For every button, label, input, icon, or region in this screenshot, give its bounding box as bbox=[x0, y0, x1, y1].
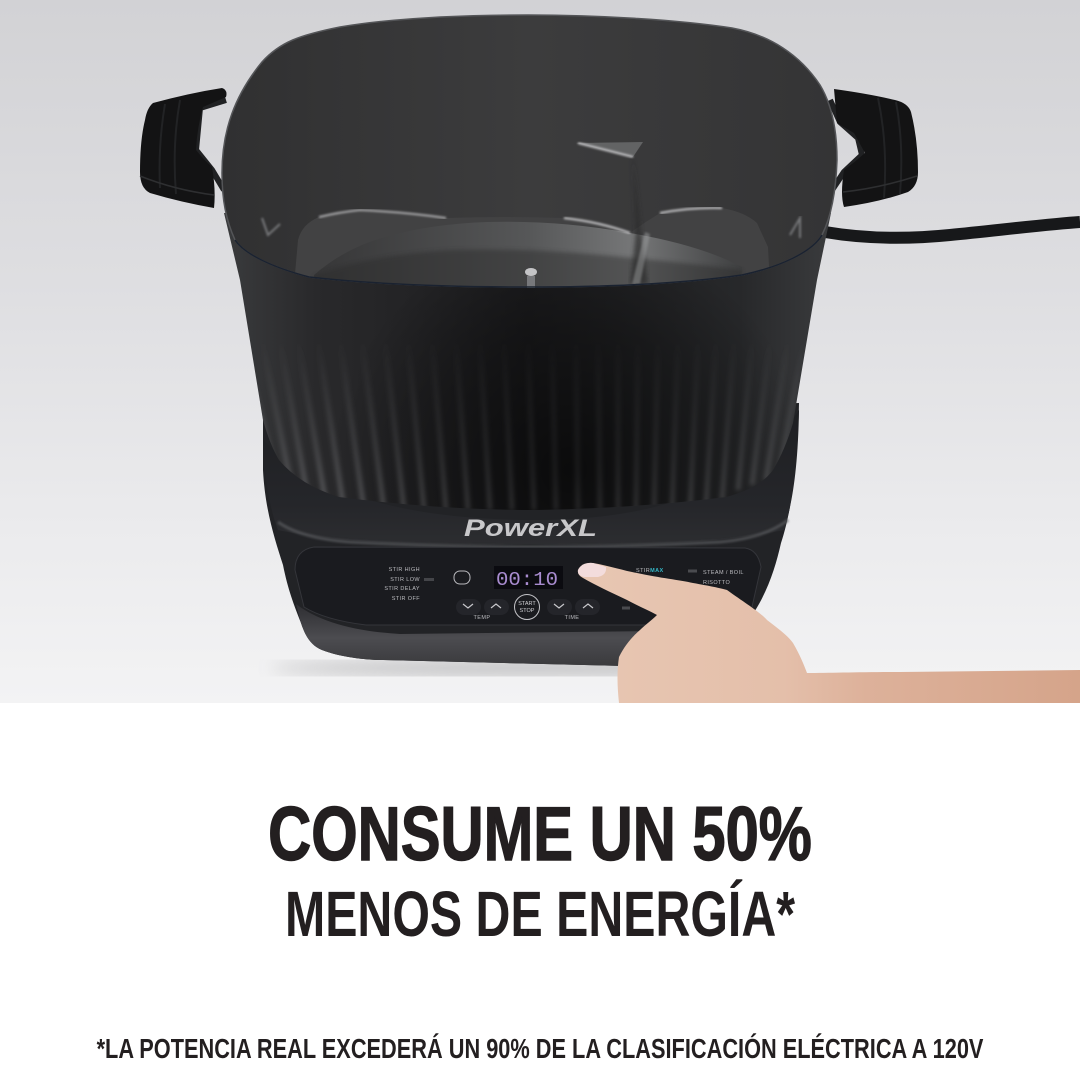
fingernail bbox=[578, 563, 606, 577]
product photo bbox=[0, 0, 1080, 703]
power cord bbox=[825, 222, 1080, 238]
logo: PowerXL bbox=[464, 515, 597, 542]
inner bowl bbox=[314, 222, 721, 286]
base band bbox=[263, 410, 799, 545]
inner ridge highlights bbox=[319, 210, 446, 218]
hand bbox=[578, 563, 1080, 703]
start stop button bbox=[514, 594, 540, 620]
heading: consume un 50%: CONSUME UN 50% bbox=[268, 792, 812, 877]
heading: menos de energía: MENOS DE ENERGÍA* bbox=[285, 878, 795, 950]
temp time labels: TIME bbox=[565, 615, 579, 621]
right indicators bbox=[622, 571, 697, 608]
handle ribs bbox=[160, 100, 180, 194]
band highlight bbox=[278, 520, 788, 547]
table shadow bbox=[270, 661, 790, 675]
pot rim and interior bbox=[222, 15, 837, 290]
pot exterior bbox=[224, 213, 831, 510]
base unit bbox=[263, 403, 799, 666]
right mode labels bbox=[636, 568, 744, 586]
button chevrons bbox=[463, 604, 593, 608]
right handle bbox=[830, 89, 918, 207]
inner wall below ridge bbox=[295, 208, 769, 276]
right mode labels: STIRMAX bbox=[636, 568, 664, 574]
stir labels: STIR LOW bbox=[390, 577, 420, 583]
handle ribs bbox=[878, 98, 901, 198]
stir labels: STIR DELAY bbox=[384, 586, 420, 592]
front rim edge bbox=[235, 235, 822, 287]
temp time labels bbox=[474, 615, 579, 621]
right mode labels: STEAM / BOIL bbox=[703, 570, 744, 576]
temp time labels: TEMP bbox=[474, 615, 490, 621]
stir labels: STIR HIGH bbox=[389, 567, 420, 573]
corner reflections bbox=[262, 218, 800, 238]
bowl dark floor bbox=[342, 249, 740, 286]
stir labels bbox=[384, 567, 420, 602]
start stop button: START bbox=[518, 601, 536, 607]
footnote: *LA POTENCIA REAL EXCEDERÁ UN 90% DE LA CLASIFICACIÓN ELÉCTRICA A 120V bbox=[97, 1033, 983, 1064]
stir paddle fin bbox=[629, 208, 649, 284]
stir labels: STIR OFF bbox=[392, 596, 420, 602]
mode icon bbox=[454, 571, 470, 584]
left handle bbox=[140, 88, 226, 208]
paddle tip bbox=[576, 142, 643, 157]
timer display: 00:10 bbox=[496, 569, 558, 591]
temp and time buttons bbox=[456, 599, 600, 615]
pot ribs bbox=[261, 382, 795, 510]
center spindle bbox=[525, 268, 537, 288]
base foot bbox=[296, 604, 740, 666]
pot shade bbox=[224, 213, 831, 510]
right mode labels: RISOTTO bbox=[703, 580, 730, 586]
indicator bbox=[424, 578, 434, 581]
control panel bbox=[295, 547, 761, 625]
start stop button: STOP bbox=[520, 608, 535, 614]
background bbox=[0, 0, 1080, 703]
